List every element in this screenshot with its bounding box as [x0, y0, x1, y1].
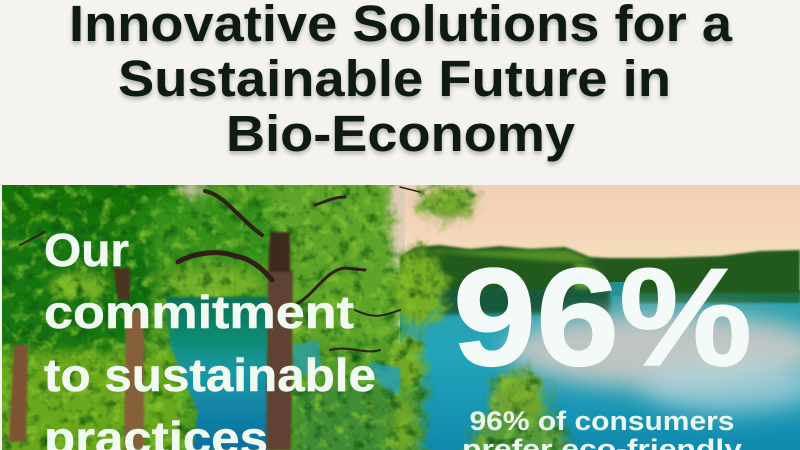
forest foliage — [2, 185, 576, 450]
trunks — [9, 232, 293, 450]
big stat: 96%: 96% — [453, 240, 752, 395]
stat caption: 96% of consumers — [470, 406, 734, 436]
photo: forest and lake — [2, 185, 800, 450]
title: Bio-Economy — [226, 108, 576, 165]
title: Sustainable Future in — [118, 50, 671, 107]
lake — [400, 290, 800, 450]
branches — [20, 187, 420, 351]
lake haze — [505, 312, 800, 388]
heading: our commitment — [44, 224, 376, 450]
stat caption — [462, 406, 742, 450]
title — [69, 0, 733, 165]
water between trees — [166, 297, 400, 450]
grey sky behind canopy — [176, 185, 206, 199]
title: Sustainable Future in — [118, 53, 671, 110]
heading: our commitment: to sustainable — [44, 349, 376, 401]
distant tree line — [400, 245, 800, 314]
sky — [188, 185, 800, 265]
heading: our commitment: commitment — [44, 286, 354, 338]
heading: our commitment: Our — [44, 224, 129, 276]
title: Bio-Economy — [226, 105, 576, 162]
